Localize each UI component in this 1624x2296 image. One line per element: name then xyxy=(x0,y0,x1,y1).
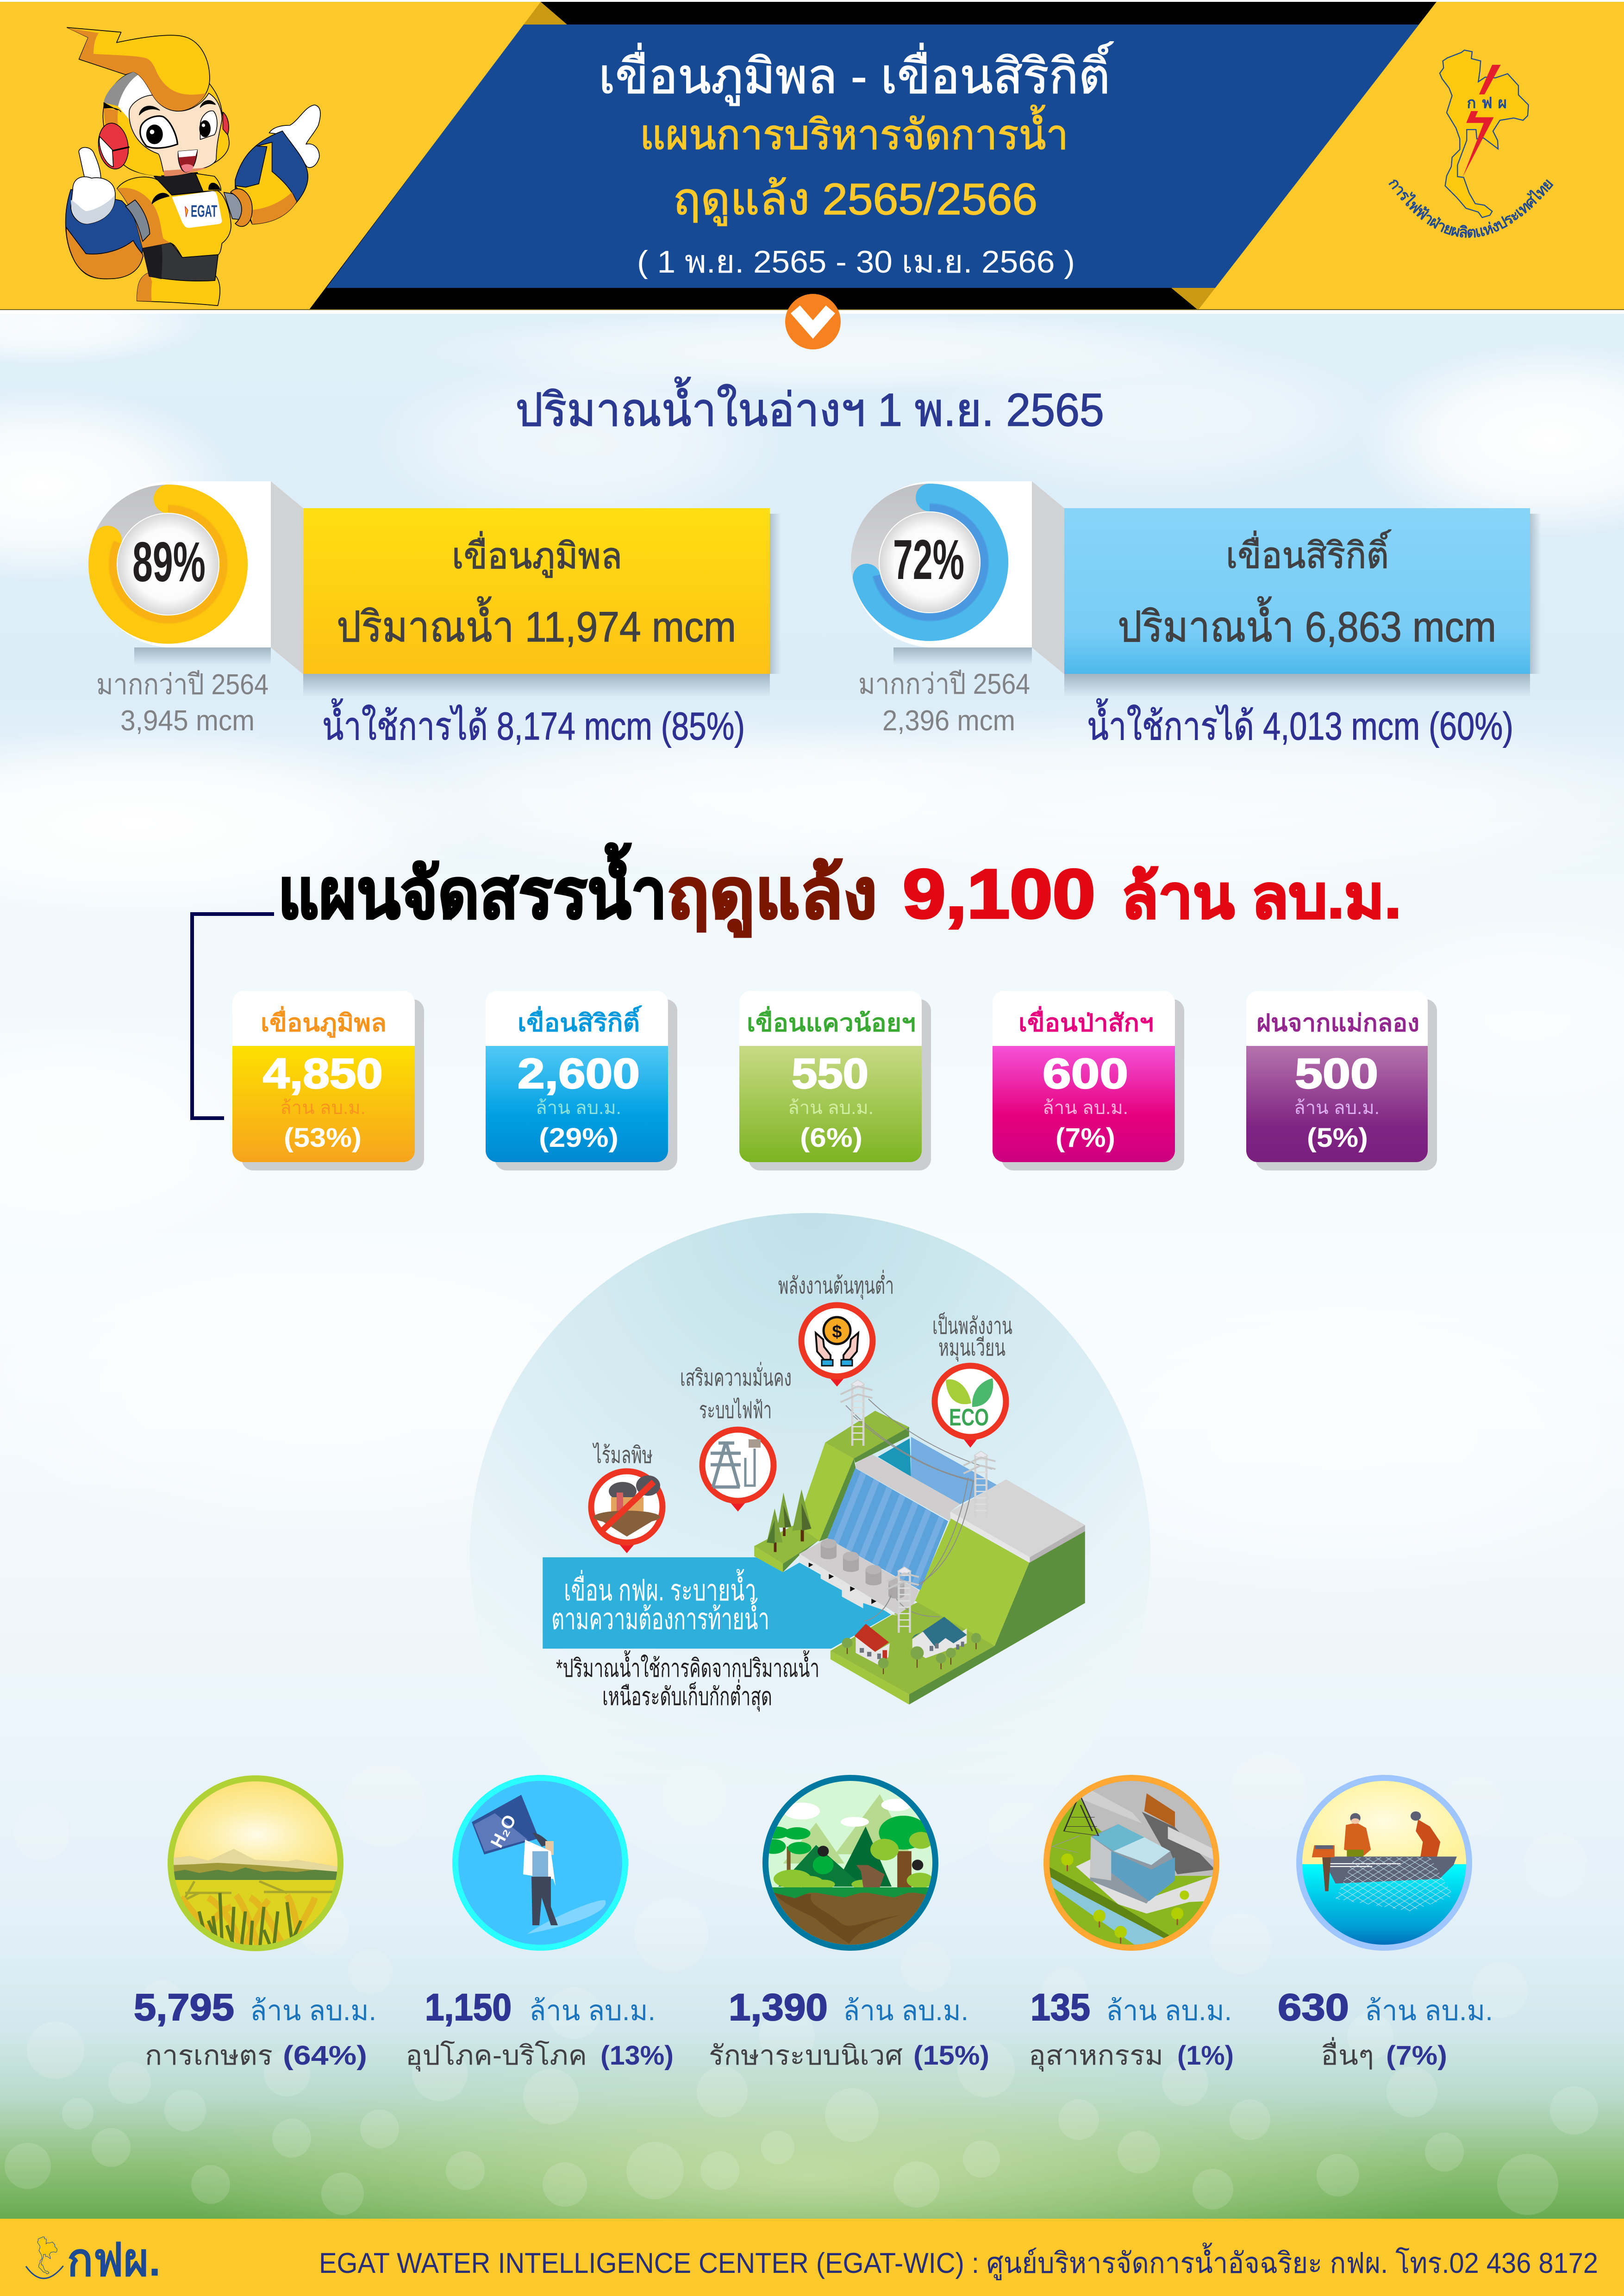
illustration: dam xyxy=(543,1380,1085,1705)
powerhouse xyxy=(800,1538,919,1615)
panel: Sirikit volume box: เขื่อนสิริกิติ์ xyxy=(1226,529,1392,576)
text: usable water: น้ำใช้การได้ 4,013 mcm (60%) xyxy=(1087,698,1513,748)
stat: consumption: อุปโภค-บริโภค xyxy=(406,2040,587,2072)
card: Khwae Noi allocation xyxy=(739,991,931,1170)
stat: industry: (1%) xyxy=(1177,2041,1234,2071)
arrow: chevron down xyxy=(785,294,841,349)
round trees xyxy=(842,1633,981,1674)
pin: no pollution xyxy=(591,1442,662,1553)
panel: Bhumibol volume box: เขื่อนภูมิพล xyxy=(452,531,622,578)
date range: ( 1 พ.ย. 2565 - 30 เม.ย. 2566 ) xyxy=(637,244,1075,280)
background circle: hydropower benefits xyxy=(470,1213,1150,1893)
text: more than 2564: มากกว่าปี 2564 xyxy=(858,668,1030,700)
stat: consumption xyxy=(406,1986,674,2072)
label: ระบบไฟฟ้า xyxy=(699,1397,772,1423)
stat: consumption: 1,150 xyxy=(425,1986,512,2028)
tree platform xyxy=(754,1524,819,1572)
note: usable water definition: เหนือระดับเก็บกักต่ำสุด xyxy=(602,1679,772,1712)
card: Pasak allocation: ล้าน ลบ.ม. xyxy=(1043,1098,1128,1118)
mascot: EGAT chest badge xyxy=(172,191,222,228)
subtitle: dry season: ฤดูแล้ง 2565/2566 xyxy=(673,174,1037,226)
mascot: head xyxy=(95,71,229,176)
text: more than 2564: 3,945 mcm xyxy=(120,705,255,737)
gauge: 89%: 89% xyxy=(132,530,206,593)
bracket connector xyxy=(192,914,274,1118)
pin: renewable energy xyxy=(932,1312,1012,1448)
marker xyxy=(591,1471,662,1553)
card: Bhumibol allocation: 4,850 xyxy=(263,1050,383,1097)
heading: dry season water allocation plan: 9,100 xyxy=(903,855,1095,933)
label: หมุนเวียน xyxy=(938,1335,1006,1362)
stat: ecosystem: รักษาระบบนิเวศ xyxy=(709,2041,903,2071)
stat: ecosystem: ล้าน ลบ.ม. xyxy=(843,1995,968,2026)
text: more than 2564: มากกว่าปี 2564 xyxy=(96,669,269,701)
card: Khwae Noi allocation: ล้าน ลบ.ม. xyxy=(788,1098,874,1118)
EGAT logo xyxy=(1386,50,1556,241)
icon: consumption xyxy=(452,1775,628,1951)
stat: agriculture xyxy=(134,1986,376,2071)
mascot: left arm xyxy=(66,148,143,279)
card: Bhumibol allocation xyxy=(232,991,424,1170)
card: Mekong rainfall allocation: (5%) xyxy=(1307,1123,1368,1153)
stat: agriculture: ล้าน ลบ.ม. xyxy=(250,1995,376,2026)
label: เสริมความมั่นคง xyxy=(680,1362,792,1391)
heading: dry season water allocation plan: ล้าน ลบ.ม. xyxy=(1121,863,1401,931)
icon: ecosystem xyxy=(759,1774,948,1951)
stat: agriculture: 5,795 xyxy=(134,1986,234,2028)
marker: $ xyxy=(832,1322,842,1342)
header band xyxy=(0,0,1624,310)
marker xyxy=(935,1366,1006,1448)
title: dams: เขื่อนภูมิพล - เขื่อนสิริกิติ์ xyxy=(599,41,1114,106)
text: more than 2564 xyxy=(858,668,1030,737)
marker xyxy=(801,1305,873,1387)
text: more than 2564 xyxy=(96,669,269,737)
panel: Sirikit dam xyxy=(851,481,1541,748)
stat: ecosystem xyxy=(709,1986,989,2071)
label: พลังงานต้นทุนต่ำ xyxy=(778,1270,894,1300)
label: ไร้มลพิษ xyxy=(592,1442,653,1468)
stat: industry: ล้าน ลบ.ม. xyxy=(1106,1995,1232,2026)
callout text: EGAT dams release water: ตามความต้องการท้ายน้ำ xyxy=(551,1598,769,1636)
card: Pasak allocation: 600 xyxy=(1043,1050,1128,1097)
callout text: EGAT dams release water xyxy=(551,1569,769,1636)
left hill xyxy=(795,1411,909,1541)
mascot xyxy=(66,27,320,305)
panel: Bhumibol volume box xyxy=(303,508,770,674)
card: Bhumibol allocation: เขื่อนภูมิพล xyxy=(261,1006,387,1038)
section heading: reservoir volume: ปริมาณน้ำในอ่างฯ 1 พ.ย. 2565 xyxy=(515,377,1104,436)
panel: Bhumibol volume box: ปริมาณน้ำ 11,974 mcm xyxy=(337,596,736,651)
dam crest and right top xyxy=(856,1454,1085,1562)
card: Sirikit allocation: เขื่อนสิริกิติ์ xyxy=(518,1005,642,1037)
card: Khwae Noi allocation: เขื่อนแควน้อยฯ xyxy=(747,1006,916,1037)
pin: low cost energy xyxy=(778,1270,894,1387)
dam right slope xyxy=(915,1518,1029,1646)
card: Mekong rainfall allocation: ล้าน ลบ.ม. xyxy=(1294,1098,1380,1118)
mascot: right arm xyxy=(224,105,320,226)
callout text: EGAT dams release water: เขื่อน กฟผ. ระบายน้ำ xyxy=(564,1569,756,1607)
card: Pasak allocation: เขื่อนป่าสักฯ xyxy=(1018,1006,1154,1037)
marker: ECO xyxy=(949,1404,989,1431)
icon: consumption: H₂O xyxy=(487,1812,520,1851)
label: เป็นพลังงาน xyxy=(932,1312,1012,1339)
card: Sirikit allocation: (29%) xyxy=(539,1123,618,1153)
text: usable water: น้ำใช้การได้ 8,174 mcm (85%) xyxy=(322,698,745,748)
reservoir water xyxy=(878,1437,997,1504)
card: Sirikit allocation: 2,600 xyxy=(518,1050,640,1097)
card: Mekong rainfall allocation: 500 xyxy=(1295,1050,1378,1097)
EGAT logo: กฟผ xyxy=(1467,94,1507,112)
spillway xyxy=(827,1468,948,1590)
stat: consumption: (13%) xyxy=(600,2041,674,2071)
card: Khwae Noi allocation: (6%) xyxy=(800,1123,862,1153)
stat: others: อื่นๆ xyxy=(1321,2037,1374,2071)
icon: others / fishery xyxy=(1296,1775,1472,1951)
icon: agriculture xyxy=(168,1775,344,1959)
gauge: 72%: 72% xyxy=(893,528,964,591)
card: Mekong rainfall allocation xyxy=(1246,991,1437,1170)
card: Khwae Noi allocation: 550 xyxy=(792,1050,868,1097)
gauge: 72% xyxy=(851,481,1064,674)
panel: Sirikit volume box xyxy=(1064,508,1530,674)
text: more than 2564: 2,396 mcm xyxy=(882,705,1015,737)
houses xyxy=(855,1617,967,1665)
stat: industry xyxy=(1029,1986,1234,2072)
stat: ecosystem: 1,390 xyxy=(729,1986,828,2028)
pine trees xyxy=(767,1489,812,1552)
stat: ecosystem: (15%) xyxy=(913,2041,989,2071)
marker xyxy=(702,1430,774,1512)
transmission towers xyxy=(841,1380,995,1633)
stat: others: (7%) xyxy=(1386,2041,1447,2071)
stat: others: ล้าน ลบ.ม. xyxy=(1365,1995,1493,2026)
lower platform xyxy=(831,1531,1085,1705)
footer logo xyxy=(26,2234,161,2286)
heading: dry season water allocation plan xyxy=(278,843,1401,937)
mascot: hair crest xyxy=(67,27,210,111)
note: usable water definition xyxy=(556,1650,819,1712)
label xyxy=(932,1312,1012,1362)
stat: consumption: ล้าน ลบ.ม. xyxy=(529,1995,656,2026)
stat: agriculture: การเกษตร xyxy=(145,2041,273,2071)
heading: dry season water allocation plan: แผนจัดสรรน้ำ xyxy=(278,843,667,933)
card: Bhumibol allocation: ล้าน ลบ.ม. xyxy=(280,1098,366,1118)
card: Mekong rainfall allocation: ฝนจากแม่กลอง xyxy=(1256,1010,1419,1037)
card: Sirikit allocation xyxy=(486,991,677,1170)
footer bar xyxy=(0,2219,1624,2296)
panel: Sirikit volume box: ปริมาณน้ำ 6,863 mcm xyxy=(1118,596,1496,651)
stat: industry: อุสาหกรรม xyxy=(1029,2041,1163,2072)
stat: agriculture: (64%) xyxy=(283,2041,367,2071)
mascot: torso xyxy=(117,173,231,305)
heading: dry season water allocation plan: ฤดูแล้ง xyxy=(667,855,877,937)
gauge: 89% xyxy=(88,481,303,674)
card: Sirikit allocation: ล้าน ลบ.ม. xyxy=(536,1098,621,1118)
subtitle: water management plan: แผนการบริหารจัดการน้ำ xyxy=(640,105,1068,158)
panel: Bhumibol dam xyxy=(88,481,781,748)
card: Bhumibol allocation: (53%) xyxy=(284,1123,362,1153)
footer logo: กฟผ. xyxy=(67,2234,161,2286)
note: usable water definition: *ปริมาณน้ำใช้การคิดจากปริมาณน้ำ xyxy=(556,1650,819,1682)
mascot: EGAT chest badge: EGAT xyxy=(191,202,217,221)
stat: others xyxy=(1278,1986,1493,2071)
stat: others: 630 xyxy=(1278,1986,1349,2028)
stat: industry: 135 xyxy=(1031,1986,1090,2028)
release water xyxy=(543,1557,891,1649)
power lines xyxy=(846,1399,992,1621)
EGAT logo: การไฟฟ้าฝ่ายผลิตแห่งประเทศไทย xyxy=(1386,174,1556,241)
pin: grid stability xyxy=(680,1362,792,1512)
label xyxy=(680,1362,792,1423)
icon: industry xyxy=(1043,1775,1219,1951)
card: Pasak allocation xyxy=(993,991,1184,1170)
card: Pasak allocation: (7%) xyxy=(1056,1123,1115,1153)
